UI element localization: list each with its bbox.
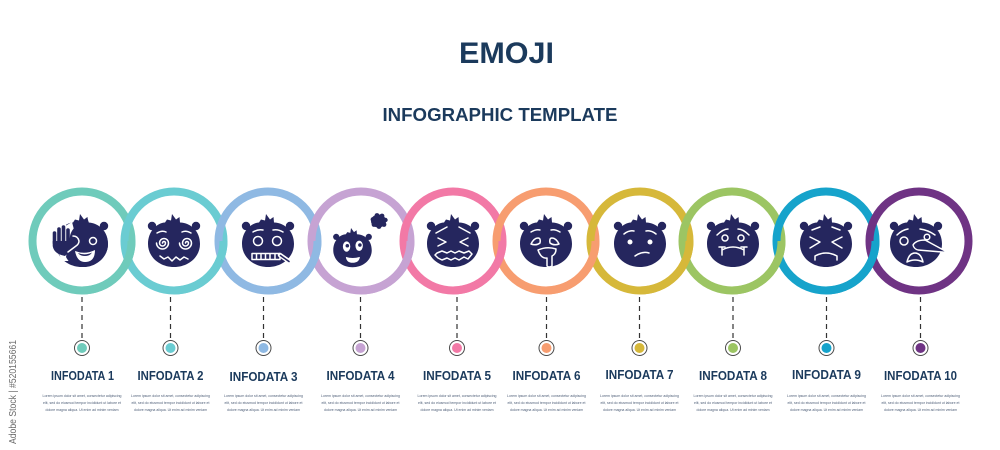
text block: infodata 6: dolore magna aliqua. Ut enim ad minim veniam: [510, 407, 584, 412]
icon: long nose lying face: [890, 214, 948, 267]
text block: infodata 5: INFODATA 5: [423, 369, 491, 383]
text block: infodata 9: [787, 368, 866, 412]
icon: grimacing squint face: [427, 214, 479, 267]
connector 1: [81, 297, 83, 338]
text block: infodata 2: dolore magna aliqua. Ut enim ad minim veniam: [134, 407, 208, 412]
text block: infodata 8: [694, 369, 773, 412]
text block: infodata 1: [42, 369, 122, 412]
text block: infodata 1: dolore magna aliqua. Ut enim ad minim veniam: [46, 407, 119, 412]
icon: drooling face: [520, 214, 572, 267]
icon: thinking face with cloud: [333, 228, 372, 267]
text block: infodata 2: elit, sed do eiusmod tempor incididunt ut labore et: [132, 400, 210, 405]
text block: infodata 3: INFODATA 3: [230, 370, 298, 384]
text block: infodata 8: Lorem ipsum dolor sit amet, consectetur adipiscing: [694, 393, 772, 398]
text block: infodata 9: elit, sed do eiusmod tempor incididunt ut labore et: [788, 400, 866, 405]
text block: infodata 7: elit, sed do eiusmod tempor incididunt ut labore et: [600, 400, 679, 405]
text block: infodata 5: elit, sed do eiusmod tempor incididunt ut labore et: [418, 400, 497, 405]
text block: infodata 2: Lorem ipsum dolor sit amet, consectetur adipiscing: [131, 393, 210, 398]
icon: zipper mouth face: [242, 214, 294, 267]
text block: infodata 4: elit, sed do eiusmod tempor incididunt ut labore et: [322, 400, 400, 405]
connector 10: [920, 297, 922, 338]
text block: infodata 4: [321, 369, 400, 412]
text block: infodata 2: [131, 369, 210, 412]
connector 4: [360, 297, 362, 338]
text block: infodata 9: INFODATA 9: [792, 368, 861, 382]
text block: infodata 6: elit, sed do eiusmod tempor incididunt ut labore et: [508, 400, 586, 405]
text block: infodata 3: elit, sed do eiusmod tempor incididunt ut labore et: [224, 400, 303, 405]
icon: sick squint face: [800, 214, 852, 267]
text block: infodata 1: Lorem ipsum dolor sit amet, consectetur adipiscing: [42, 393, 122, 398]
connector 9: [826, 297, 828, 338]
title: EMOJI: [459, 37, 554, 70]
icon: confused face: [614, 214, 666, 267]
text block: infodata 9: dolore magna aliqua. Ut enim ad minim veniam: [790, 407, 864, 412]
text block: infodata 5: Lorem ipsum dolor sit amet, consectetur adipiscing: [418, 393, 496, 398]
marker 4: [353, 340, 368, 356]
text block: infodata 4: Lorem ipsum dolor sit amet, consectetur adipiscing: [321, 393, 400, 398]
text block: infodata 4: INFODATA 4: [326, 369, 395, 383]
text block: infodata 6: INFODATA 6: [512, 369, 581, 383]
text block: infodata 10: [881, 369, 960, 412]
text block: infodata 4: dolore magna aliqua. Ut enim ad minim veniam: [324, 407, 398, 412]
ring chain: [32, 192, 968, 290]
text block: infodata 10: INFODATA 10: [884, 369, 957, 383]
marker 1: [74, 340, 90, 356]
connector 7: [638, 297, 640, 338]
icon: thought cloud: [371, 213, 388, 229]
marker 7: [632, 340, 647, 356]
text block: infodata 10: dolore magna aliqua. Ut enim ad minim veniam: [884, 407, 958, 412]
connector 3: [262, 297, 264, 338]
text block: infodata 7: dolore magna aliqua. Ut enim ad minim veniam: [603, 407, 677, 412]
text block: infodata 7: [600, 368, 679, 412]
marker 2: [163, 340, 178, 356]
text block: infodata 8: elit, sed do eiusmod tempor incididunt ut labore et: [694, 400, 773, 405]
text block: infodata 3: Lorem ipsum dolor sit amet, consectetur adipiscing: [224, 393, 303, 398]
text block: infodata 7: Lorem ipsum dolor sit amet, consectetur adipiscing: [600, 393, 679, 398]
marker 5: [450, 340, 464, 356]
marker 8: [726, 340, 740, 356]
text block: infodata 2: INFODATA 2: [138, 369, 204, 383]
text block: infodata 1: INFODATA 1: [51, 369, 114, 383]
marker 10: [913, 340, 928, 356]
text block: infodata 10: elit, sed do eiusmod tempor incididunt ut labore et: [882, 400, 960, 405]
marker 3: [256, 340, 271, 356]
source credit: Adobe Stock | #520155661: [8, 340, 19, 444]
icon: face waving hand: [53, 214, 108, 267]
icon: dizzy face: [148, 214, 200, 267]
text block: infodata 3: [224, 370, 303, 412]
text block: infodata 7: INFODATA 7: [606, 368, 674, 382]
text block: infodata 5: dolore magna aliqua. Ut enim ad minim veniam: [420, 407, 494, 412]
text block: infodata 8: dolore magna aliqua. Ut enim ad minim veniam: [696, 407, 770, 412]
marker 6: [539, 340, 554, 356]
icon: nauseated face: [707, 214, 759, 267]
text block: infodata 1: elit, sed do eiusmod tempor incididunt ut labore et: [43, 400, 122, 405]
connector 2: [170, 297, 172, 338]
text block: infodata 6: Lorem ipsum dolor sit amet, consectetur adipiscing: [507, 393, 586, 398]
text block: infodata 10: Lorem ipsum dolor sit amet, consectetur adipiscing: [881, 393, 960, 398]
text block: infodata 5: [418, 369, 497, 412]
connector 6: [546, 297, 548, 338]
text block: infodata 8: INFODATA 8: [699, 369, 767, 383]
subtitle: INFOGRAPHIC TEMPLATE: [382, 105, 618, 125]
connector 5: [456, 297, 458, 338]
connector 8: [732, 297, 734, 338]
text block: infodata 6: [507, 369, 586, 412]
text block: infodata 3: dolore magna aliqua. Ut enim ad minim veniam: [227, 407, 301, 412]
marker 9: [819, 340, 834, 356]
text block: infodata 9: Lorem ipsum dolor sit amet, consectetur adipiscing: [787, 393, 866, 398]
